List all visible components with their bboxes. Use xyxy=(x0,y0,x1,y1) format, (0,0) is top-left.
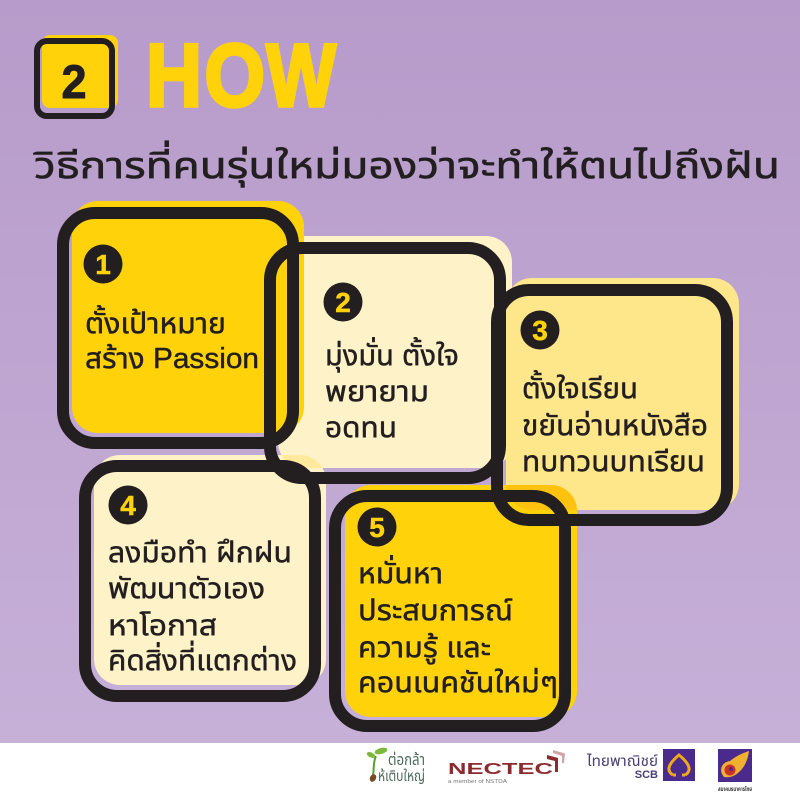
logo: Thai Bankers Association: สมาคมธนาคารไทย xyxy=(718,785,752,793)
step 1 xyxy=(84,244,259,375)
step 1: สร้าง Passion xyxy=(85,343,259,375)
heading: HOW: H xyxy=(146,25,202,125)
step 2 xyxy=(324,282,459,444)
step 5: ความรู้ และ xyxy=(358,632,491,665)
step 2: 2 xyxy=(335,287,351,318)
step 5: หมั่นหา xyxy=(358,555,443,590)
step 5: คอนเนคชันใหม่ๆ xyxy=(358,667,558,699)
logo: seedling: ต่อกล้า xyxy=(388,751,425,769)
step 3: ขยันอ่านหนังสือ xyxy=(522,410,708,442)
logo: SCB: SCB xyxy=(635,769,658,781)
step 2: มุ่งมั่น ตั้งใจ xyxy=(325,337,459,372)
logo: SCB xyxy=(586,749,695,781)
step 5: ประสบการณ์ xyxy=(358,595,513,627)
panel fills: step backgrounds xyxy=(72,201,739,717)
step 4: พัฒนาตัวเอง xyxy=(108,573,265,605)
subtitle: วิธีการที่คนรุ่นใหม่มองว่าจะทำให้ตนไปถึงฝัน xyxy=(32,140,780,188)
step 2: พยายาม xyxy=(325,376,429,408)
heading: HOW xyxy=(146,25,336,125)
step 1: ตั้งเป้าหมาย xyxy=(85,305,226,340)
logo: NECTEC: a member of NSTDA xyxy=(448,779,507,785)
logo: NECTEC: NECTEC xyxy=(448,761,554,778)
step 4: หาโอกาส xyxy=(108,610,217,642)
logo: seedling: ห้เติบใหญ่ xyxy=(378,767,425,785)
heading: HOW: W xyxy=(266,25,336,125)
logo: NECTEC xyxy=(448,750,565,785)
heading: HOW: O xyxy=(204,25,265,125)
step 4: ลงมือทำ ฝึกฝน xyxy=(108,537,292,569)
step 4: 4 xyxy=(120,490,136,521)
step 1: 1 xyxy=(95,249,111,280)
step 3 xyxy=(520,310,708,478)
step 3: ทบทวนบทเรียน xyxy=(522,446,705,478)
panel outlines: step frames xyxy=(63,213,727,726)
step 4 xyxy=(108,486,297,677)
step 5: 5 xyxy=(369,512,385,543)
step 3: 3 xyxy=(532,315,548,346)
logo: seedling xyxy=(366,746,425,785)
step 5 xyxy=(358,508,558,699)
step 4: คิดสิ่งที่แตกต่าง xyxy=(108,640,297,677)
section badge: 2 xyxy=(62,55,86,108)
footer band xyxy=(0,743,800,800)
step 2: อดทน xyxy=(325,412,397,444)
logo: Thai Bankers Association xyxy=(718,749,752,793)
step 3: ตั้งใจเรียน xyxy=(522,370,638,405)
logo: SCB: ไทยพาณิชย์ xyxy=(586,753,658,770)
section badge xyxy=(37,35,118,116)
